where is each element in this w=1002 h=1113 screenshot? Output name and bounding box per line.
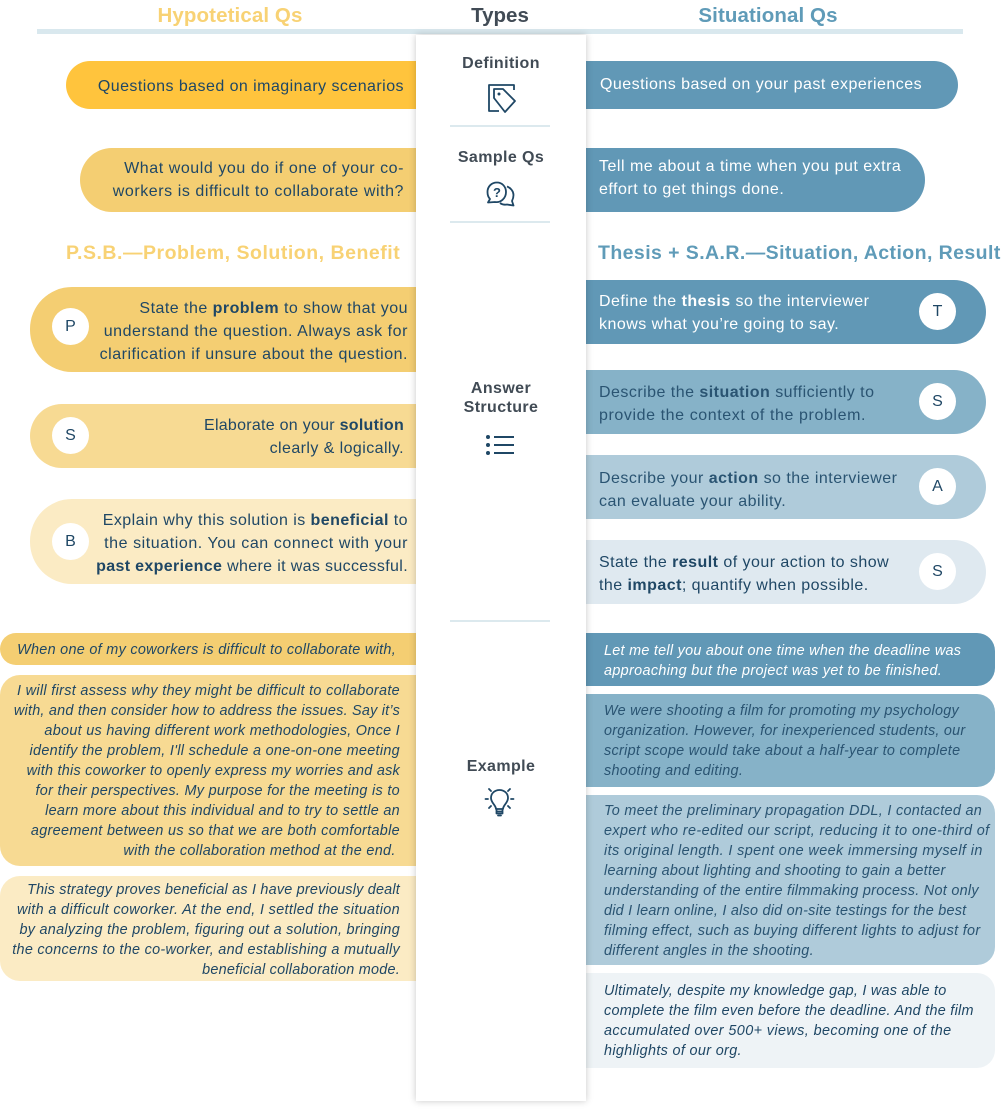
pill: situational definition xyxy=(586,61,958,109)
text: hypothetical solution: with, and then consider how to address the issues. Say it’s xyxy=(14,702,400,718)
circle: B xyxy=(52,523,89,560)
text: thesis xyxy=(599,293,869,333)
text: solution: Elaborate on your solution xyxy=(204,417,404,434)
text: benefit: past experience where it was successful. xyxy=(96,558,408,575)
text: result: State the result of your action to show xyxy=(599,554,889,571)
text: solution: clearly & logically. xyxy=(270,440,404,457)
text: result example: complete the film even before the deadline. And the film xyxy=(604,1002,974,1018)
text: hypothetical sample question: workers is difficult to collaborate with? xyxy=(113,183,404,200)
text: situational opening: Let me tell you about one time when the deadline was xyxy=(604,642,961,658)
heading: P.S.B. structure: P.S.B.—Problem, Solution, Benefit xyxy=(66,242,400,264)
text: result example: highlights of our org. xyxy=(604,1042,742,1058)
circle: S: S xyxy=(932,393,943,410)
text: hypothetical sample question xyxy=(112,160,404,200)
label: answer structure: Answer xyxy=(471,380,531,397)
text: situational opening xyxy=(604,642,961,678)
pill: problem xyxy=(30,287,416,372)
circle: S xyxy=(919,553,956,590)
example: hypothetical solution xyxy=(0,675,416,866)
text: action example: understanding of the entire filmmaking process. Not only xyxy=(604,883,979,899)
pill: solution xyxy=(30,404,416,468)
text: hypothetical definition: Questions based on imaginary scenarios xyxy=(98,78,404,94)
text: situation example: organization. However, for inexperienced students, our xyxy=(604,722,965,738)
text: situation: provide the context of the problem. xyxy=(599,407,866,424)
circle: S: S xyxy=(932,563,943,580)
text: result xyxy=(599,554,889,594)
text: hypothetical benefit xyxy=(12,882,400,978)
circle: P: P xyxy=(65,318,76,335)
text: action example: did I learn online, I also did on-site testings for the best xyxy=(604,903,966,919)
pill: action xyxy=(586,455,986,519)
text: situation example: We were shooting a film for promoting my psychology xyxy=(604,702,959,718)
text: hypothetical solution xyxy=(14,682,400,858)
label: sample questions: Sample Qs xyxy=(458,149,544,166)
text: hypothetical solution: about us having different work methodologies, Once I xyxy=(44,722,400,738)
text: hypothetical benefit: beneficial collaboration mode. xyxy=(202,962,400,978)
pill: situation xyxy=(586,370,986,434)
pill: result xyxy=(586,540,986,604)
text: situational sample question: Tell me about a time when you put extra xyxy=(599,158,901,175)
text: hypothetical solution: identify the problem, I'll schedule a one-on-one meeting xyxy=(30,742,400,758)
circle: B: B xyxy=(65,533,76,550)
text: hypothetical benefit: This strategy proves beneficial as I have previously dealt xyxy=(27,882,400,898)
text: thesis: knows what you’re going to say. xyxy=(599,316,839,333)
text: hypothetical benefit: by analyzing the problem, figuring out a solution, bringing xyxy=(19,922,400,938)
circle: S xyxy=(52,417,89,454)
text: action example: expert who re-edited our script, reducing it to one-third of xyxy=(604,823,990,839)
example: hypothetical opening xyxy=(0,633,416,665)
text: action xyxy=(599,470,897,510)
header: types column title: Types xyxy=(471,4,529,27)
text: problem: clarification if unsure about the question. xyxy=(100,346,408,363)
panel: types column xyxy=(416,35,586,1101)
example: hypothetical benefit xyxy=(0,876,416,981)
text: action: can evaluate your ability. xyxy=(599,493,786,510)
text: action example: learning about lighting and shooting to gain a better xyxy=(604,863,946,879)
circle: T: T xyxy=(933,303,942,320)
text: result example xyxy=(604,982,974,1058)
heading: Thesis + S.A.R. structure: Thesis + S.A.R.—Situation, Action, Result xyxy=(598,242,1001,264)
pill: hypothetical definition xyxy=(66,61,416,109)
pill: hypothetical sample question xyxy=(80,148,416,212)
pill: situational sample question xyxy=(586,148,925,212)
text: hypothetical solution: I will first assess why they might be difficult to collaborate xyxy=(17,682,400,698)
text: action example: its original length. I spent one week immersing myself in xyxy=(604,843,983,859)
icon: question speech bubbles: ? xyxy=(493,185,501,200)
text: hypothetical sample question: What would you do if one of your co- xyxy=(124,160,404,177)
header: situational column title: Situational Qs xyxy=(698,4,838,27)
text: action example: different angles in the shooting. xyxy=(604,943,814,959)
header: hypothetical column title: Hypotetical Qs xyxy=(158,4,302,27)
text: thesis: Define the thesis so the interviewer xyxy=(599,293,869,310)
text: action: Describe your action so the interviewer xyxy=(599,470,897,487)
circle: A xyxy=(919,468,956,505)
text: situation example: shooting and editing. xyxy=(604,762,743,778)
circle: S: S xyxy=(65,427,76,444)
text: result example: accumulated over 500+ views, becoming one of the xyxy=(604,1022,952,1038)
circle: S xyxy=(919,383,956,420)
text: problem: understand the question. Always ask for xyxy=(104,323,408,340)
example: situation xyxy=(586,694,995,787)
circle: T xyxy=(919,293,956,330)
text: hypothetical solution: agreement between us so that we are both comfortable xyxy=(31,822,400,838)
text: hypothetical solution: learn more about this individual and to try to settle an xyxy=(45,802,400,818)
text: hypothetical benefit: with a difficult coworker. At the end, I settled the situation xyxy=(17,902,400,918)
example: situational opening xyxy=(586,633,995,686)
text: situational sample question xyxy=(599,158,901,198)
text: hypothetical solution: with the collaboration method at the end. xyxy=(123,842,396,858)
text: problem xyxy=(100,300,408,363)
label: answer structure xyxy=(464,380,538,416)
text: situational sample question: effort to get things done. xyxy=(599,181,784,198)
text: situation example xyxy=(604,702,966,778)
text: action example: To meet the preliminary propagation DDL, I contacted an xyxy=(604,803,982,819)
icon: light bulb xyxy=(484,788,514,816)
icon: question speech bubbles xyxy=(486,182,514,206)
label: example: Example xyxy=(467,758,535,775)
text: situational definition: Questions based on your past experiences xyxy=(600,76,922,92)
text: situational opening: approaching but the project was yet to be finished. xyxy=(604,662,942,678)
text: solution xyxy=(204,417,404,457)
icon: tag xyxy=(488,84,516,113)
text: hypothetical solution: for their perspectives. My purpose for the meeting is to xyxy=(36,782,400,798)
text: benefit: Explain why this solution is beneficial to xyxy=(103,512,408,529)
text: action example xyxy=(604,803,990,959)
circle: A: A xyxy=(932,478,943,495)
icon: list xyxy=(486,435,514,455)
label: answer structure: Structure xyxy=(464,399,538,416)
text: hypothetical benefit: the concerns to the co-worker, and establishing a mutually xyxy=(12,942,400,958)
label: definition: Definition xyxy=(462,55,540,72)
text: result: the impact; quantify when possible. xyxy=(599,577,869,594)
pill: benefit xyxy=(30,499,416,584)
text: benefit xyxy=(96,512,408,575)
pill: thesis xyxy=(586,280,986,344)
text: action example: filming effect, such as buying different lights to adjust for xyxy=(604,923,980,939)
text: hypothetical opening: When one of my coworkers is difficult to collaborate with, xyxy=(17,642,396,658)
text: result example: Ultimately, despite my knowledge gap, I was able to xyxy=(604,982,947,998)
text: hypothetical solution: with this coworker to openly express my worries and ask xyxy=(27,762,400,778)
circle: P xyxy=(52,308,89,345)
text: benefit: the situation. You can connect with your xyxy=(104,535,408,552)
text: situation: Describe the situation sufficiently to xyxy=(599,384,874,401)
text: situation xyxy=(599,384,874,424)
example: action xyxy=(586,795,995,965)
example: result xyxy=(586,973,995,1068)
text: situation example: script scope would take about a half-year to complete xyxy=(604,742,960,758)
text: problem: State the problem to show that you xyxy=(139,300,408,317)
